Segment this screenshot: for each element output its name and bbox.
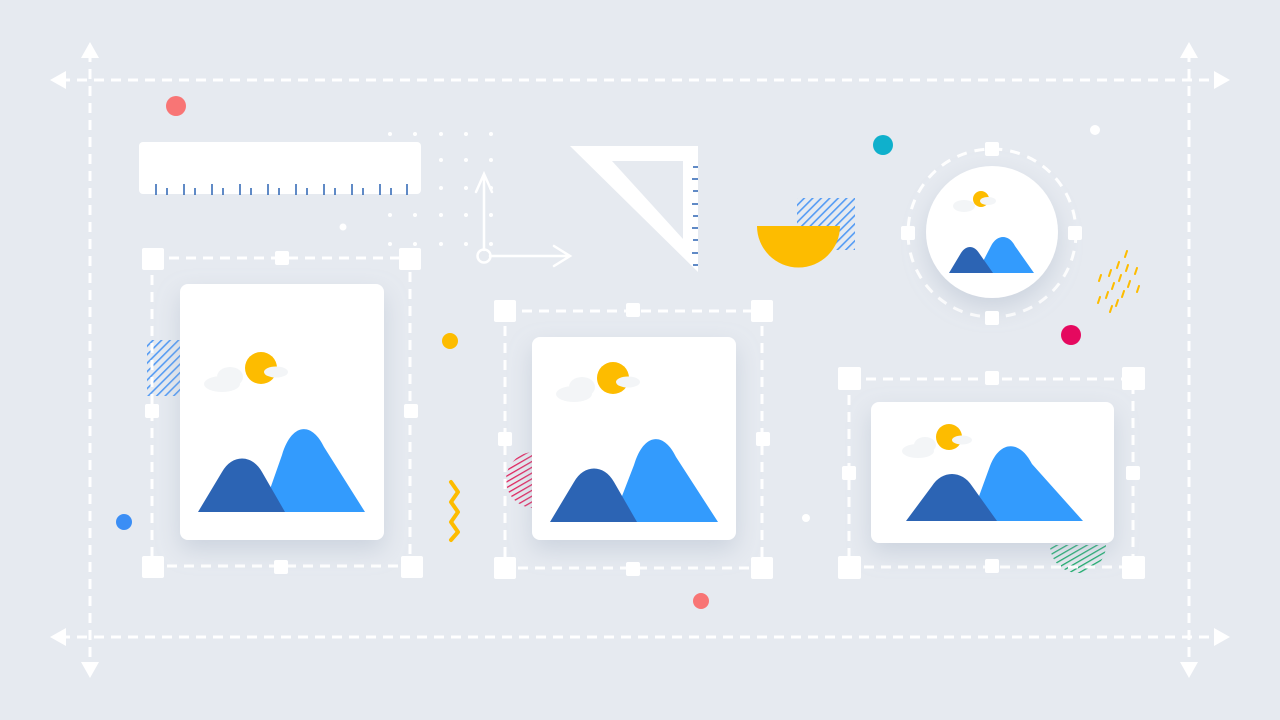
blue hatch square (797, 198, 855, 250)
dot: magenta (1061, 325, 1081, 345)
card 2 square image (494, 300, 773, 579)
dot: yellow (442, 333, 458, 349)
red hatched semicircle (506, 452, 534, 508)
green hatched semicircle (1050, 545, 1106, 573)
yellow dashes (1098, 251, 1139, 312)
circle image badge (901, 142, 1082, 325)
yellow half circle (757, 226, 840, 268)
dot grid (340, 132, 493, 246)
yellow zigzag (451, 482, 458, 540)
blue hatch left (147, 340, 187, 396)
dot: blue (116, 514, 132, 530)
set square triangle (570, 146, 698, 272)
ruler (139, 142, 421, 195)
dot: white (1090, 125, 1100, 135)
card 3 landscape image (838, 367, 1145, 579)
axis arrows (476, 174, 570, 266)
dot: red bottom (693, 593, 709, 609)
card 1 portrait image (142, 248, 423, 578)
dot: teal (873, 135, 893, 155)
dot: white small (802, 514, 810, 522)
dot: red top-left (166, 96, 186, 116)
